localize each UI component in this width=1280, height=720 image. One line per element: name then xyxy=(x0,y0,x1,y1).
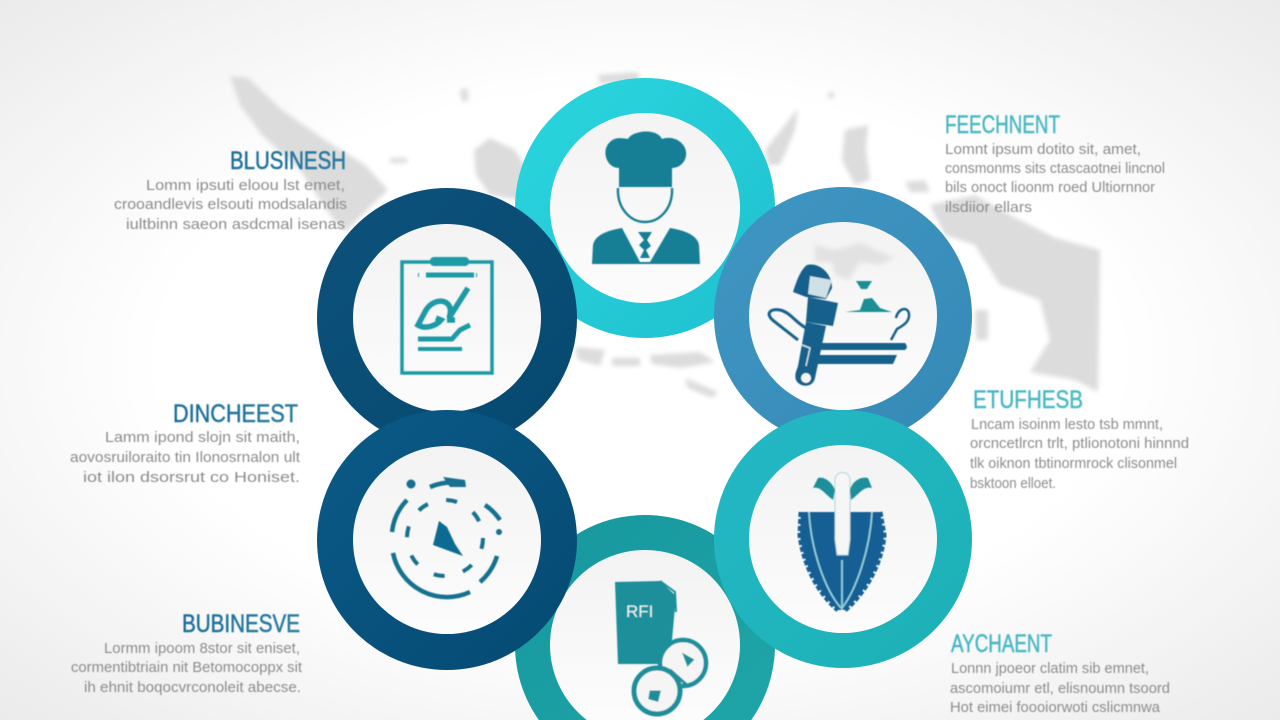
body: ascomoiumr etl, elisnoumn tsoord xyxy=(950,680,1170,697)
icon: book and coins: RFI xyxy=(626,602,653,621)
text block: lower right xyxy=(950,630,1170,716)
panel: top ring chef xyxy=(515,78,775,338)
panel: lower left ring compass xyxy=(317,410,577,670)
panel: upper left ring clipboard xyxy=(317,188,577,448)
icon: wrench and tray xyxy=(769,264,909,386)
panel: upper right ring tools xyxy=(714,187,972,445)
body: consmonms sits ctascaotnei lincnol xyxy=(945,160,1165,177)
heading: ETUFHESB xyxy=(973,386,1083,414)
body xyxy=(945,141,1165,216)
world map silhouette xyxy=(230,72,1100,398)
text block: lower left xyxy=(71,610,303,696)
body: Lonnn jpoeor clatim sib emnet, xyxy=(951,660,1149,677)
text block: middle left xyxy=(70,400,301,486)
icon: stopwatch xyxy=(392,477,502,597)
body: tlk oiknon tbtinormrock clisonmel xyxy=(970,455,1177,472)
panel: lower right ring trowel xyxy=(714,410,972,668)
body: bils onoct lioonm roed Ultiornnor xyxy=(945,179,1155,196)
heading: BLUSINESH xyxy=(230,147,346,175)
body xyxy=(970,416,1189,492)
heading: FEECHNENT xyxy=(945,111,1060,139)
body: bsktoon elloet. xyxy=(970,475,1056,492)
icon: clipboard xyxy=(402,257,492,373)
icon: book and coins xyxy=(615,581,706,714)
body: orcncetlrcn trlt, ptlionotoni hinnnd xyxy=(970,435,1189,452)
body: iot ilon dsorsrut co Honiset. xyxy=(83,469,300,486)
heading: AYCHAENT xyxy=(951,630,1052,658)
body: aovosruiloraito tin Ilonosrnalon ult xyxy=(70,449,301,466)
text block: upper right xyxy=(945,111,1165,216)
body: iultbinn saeon asdcmal isenas xyxy=(126,216,345,233)
body: crooandlevis elsouti modsalandis xyxy=(114,196,347,213)
body xyxy=(114,177,347,233)
body xyxy=(950,660,1170,716)
body: cormentibtriain nit Betomocoppx sit xyxy=(71,659,303,676)
body xyxy=(70,429,301,486)
heading: DINCHEEST xyxy=(173,400,298,428)
icon: trowel xyxy=(800,472,884,610)
body: Lncam isoinm lesto tsb mmnt, xyxy=(971,416,1163,433)
body: ih ehnit boqocvrconoleit abecse. xyxy=(84,679,301,696)
text block: middle right xyxy=(970,386,1189,492)
heading: BUBINESVE xyxy=(182,610,300,638)
body: Lomnt ipsum dotito sit, amet, xyxy=(945,141,1141,158)
body: Hot eimei foooiorwoti cslicmnwa xyxy=(950,699,1161,716)
icon: chef xyxy=(592,131,700,264)
panel: bottom ring book xyxy=(515,515,775,720)
body: Lormm ipoom 8stor sit eniset, xyxy=(104,640,300,657)
body: ilsdiior ellars xyxy=(945,199,1032,216)
body: Lamm ipond slojn sit maith, xyxy=(105,429,300,446)
map fragment inside ring xyxy=(815,243,895,280)
body: Lomm ipsuti eloou lst emet, xyxy=(146,177,345,194)
text block: upper left xyxy=(114,147,347,233)
body xyxy=(71,640,303,696)
